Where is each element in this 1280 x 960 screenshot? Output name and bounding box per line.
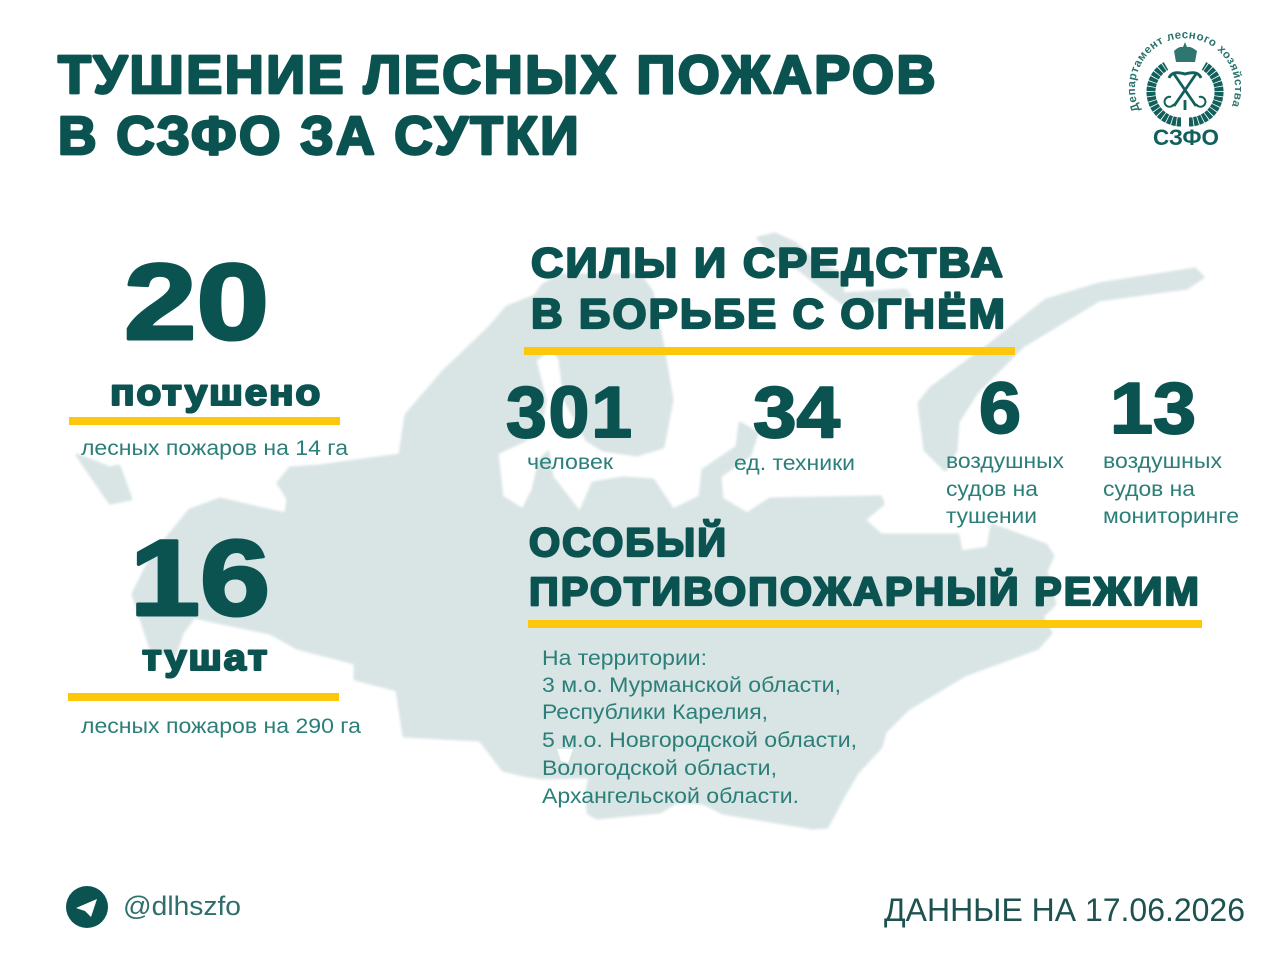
logo arc text: Департамент лесного хозяйства	[1128, 32, 1242, 111]
stat: vehicles: 34	[753, 373, 840, 453]
stat: firefighting aircraft	[946, 369, 1065, 528]
territories list: 3 м.о. Мурманской области,	[542, 674, 841, 697]
heading: special fire regime: ОСОБЫЙ	[529, 519, 728, 565]
stat: firefighting aircraft: 6	[979, 369, 1021, 449]
yellow rule: forces	[524, 347, 1015, 355]
background map of the north-west district	[77, 234, 1203, 828]
title: В СЗФО ЗА СУТКИ	[58, 106, 581, 166]
map notch	[557, 749, 573, 763]
stat: firefighting aircraft: воздушных	[946, 450, 1065, 473]
label extinguished: потушено	[110, 372, 322, 413]
stat: vehicles	[734, 373, 855, 475]
stat: firefighting aircraft: тушении	[946, 505, 1037, 528]
yellow rule	[68, 693, 339, 701]
label being extinguished: тушат	[142, 637, 269, 678]
territories list: 5 м.о. Новгородской области,	[542, 729, 857, 752]
logo caption: СЗФО	[1153, 125, 1219, 150]
territories list: Архангельской области.	[542, 785, 799, 808]
icon: telegram	[66, 886, 108, 928]
heading: forces and means	[531, 239, 1007, 337]
stat: monitoring aircraft: мониторинге	[1103, 505, 1239, 528]
telegram handle: @dlhszfo	[123, 891, 241, 921]
yellow rule: regime	[528, 620, 1202, 628]
stat: monitoring aircraft: судов на	[1103, 478, 1195, 501]
title	[58, 45, 938, 166]
heading: special fire regime	[529, 519, 1201, 614]
stat: active fires	[68, 517, 361, 738]
stat: monitoring aircraft: воздушных	[1103, 450, 1223, 473]
logo crown	[1174, 42, 1197, 62]
territories list: Республики Карелия,	[542, 701, 768, 724]
territories list	[542, 647, 857, 808]
number 16: 16	[130, 517, 270, 638]
heading: special fire regime: ПРОТИВОПОЖАРНЫЙ РЕЖИМ	[529, 568, 1201, 614]
caption: лесных пожаров на 14 га	[81, 437, 348, 460]
heading: forces and means: СИЛЫ И СРЕДСТВА	[531, 239, 1005, 286]
yellow rule	[69, 417, 340, 425]
territories list: На территории:	[542, 647, 707, 670]
territories list: Вологодской области,	[542, 757, 777, 780]
title: ТУШЕНИЕ ЛЕСНЫХ ПОЖАРОВ	[58, 45, 938, 105]
logo: department emblem	[1128, 32, 1242, 150]
logo wreath	[1151, 66, 1219, 122]
stat: people: человек	[527, 451, 614, 474]
heading: forces and means: В БОРЬБЕ С ОГНЁМ	[531, 290, 1007, 337]
stat: firefighting aircraft: судов на	[946, 478, 1038, 501]
caption: лесных пожаров на 290 га	[81, 715, 361, 738]
number 20: 20	[124, 241, 269, 362]
stat: monitoring aircraft	[1103, 369, 1239, 528]
data date: ДАННЫЕ НА 17.06.2026	[884, 892, 1245, 928]
stat: monitoring aircraft: 13	[1110, 369, 1196, 449]
stat: vehicles: ед. техники	[734, 452, 855, 475]
stat: people: 301	[506, 373, 634, 453]
stat: extinguished fires	[69, 241, 348, 460]
